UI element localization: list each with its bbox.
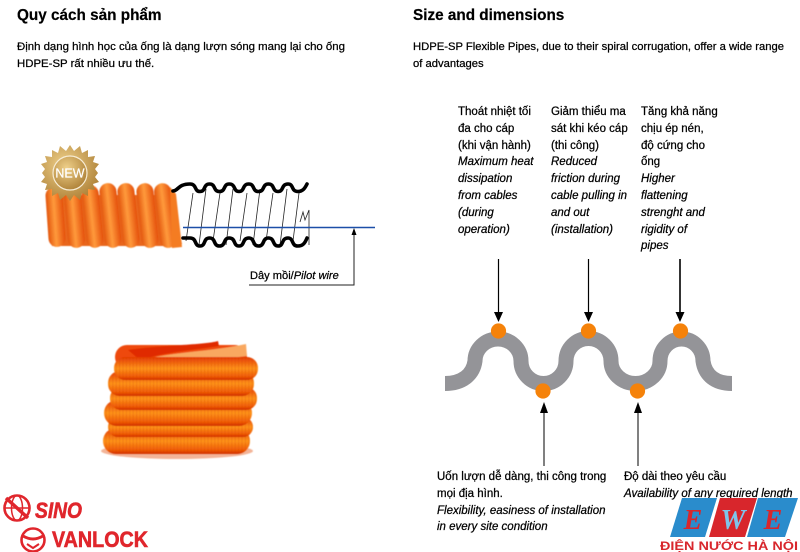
cross-section: spiral wire lines (186, 189, 309, 245)
text block: English intro: of advantages (413, 58, 484, 70)
callout: heat dissipation: (khi vận hành) (458, 140, 531, 152)
heading: Size and dimensions: Size and dimensions (413, 7, 564, 24)
VANLOCK logo: VANLOCK (52, 527, 148, 552)
callout: heat dissipation: đa cho cáp (458, 123, 514, 135)
EWE logo: E (763, 505, 782, 536)
text block: Vietnamese intro (16, 41, 345, 70)
callout: heat dissipation: Thoát nhiệt tối (458, 106, 531, 118)
callout: reduced friction: (installation) (551, 224, 613, 236)
EWE logo: E (683, 505, 702, 536)
callout: heat dissipation: operation) (458, 224, 510, 236)
callout: flexibility: mọi địa hình. (437, 488, 503, 500)
corrugated wall diagram (445, 323, 732, 399)
callout: flattening strength: strenght and (641, 207, 705, 219)
callout: flattening strength: chịu ép nén, (641, 123, 704, 135)
callout: reduced friction: Giảm thiểu ma (551, 106, 626, 118)
icon: VANLOCK emblem (22, 528, 44, 552)
icon: SINO globe (4, 496, 30, 520)
callout: flattening strength: ống (641, 156, 660, 168)
callout: flexibility: Uốn lượn dễ dàng, thi công trong (437, 471, 606, 483)
pilot wire leader arrow (249, 228, 356, 285)
cross-section: corrugated walls (173, 184, 307, 246)
arrow: flexibility (540, 402, 548, 466)
callout: reduced friction: Reduced (551, 156, 597, 168)
heading: Quy cách sản phẩm: Quy cách sản phẩm (17, 7, 162, 24)
arrow: reduced friction (584, 259, 593, 322)
callout: reduced friction: sát khi kéo cáp (551, 123, 628, 135)
SINO logo: SINO (35, 498, 82, 523)
callout: required length: Availability of any required length (624, 488, 793, 500)
callout: flattening strength: rigidity of (641, 224, 687, 236)
text block: English intro (413, 41, 784, 70)
orange markers (491, 323, 688, 399)
NEW badge (41, 145, 99, 201)
callout: flattening strength: flattening (641, 190, 688, 202)
callout: reduced friction: friction during (551, 173, 620, 185)
text block: English intro: HDPE-SP Flexible Pipes, due to their spiral corrugation, offer a wide range (413, 41, 784, 53)
callout: heat dissipation (458, 105, 534, 236)
callout: flattening strength: pipes (641, 240, 668, 252)
callout: reduced friction: and out (551, 207, 589, 219)
arrow: flattening strength (676, 259, 684, 322)
callout: reduced friction: (thi công) (551, 140, 599, 152)
arrow: required length (634, 402, 642, 466)
callout: flattening strength: Tăng khả năng (641, 106, 718, 118)
callout: reduced friction (551, 104, 628, 236)
callout: heat dissipation: Maximum heat (458, 156, 533, 168)
callout: required length: Độ dài theo yêu cầu (624, 471, 726, 483)
grey wave profile (445, 338, 732, 384)
VANLOCK logo (22, 527, 148, 552)
callout: heat dissipation: (during (458, 207, 494, 219)
coiled orange pipe (101, 341, 258, 459)
pilot wire label: Dây mồi/Pilot wire (250, 270, 339, 282)
callout: flexibility: in every site condition (437, 521, 548, 533)
text block: Vietnamese intro: Định dạng hình học của ống là dạng lượn sóng mang lại cho ống (17, 41, 345, 53)
callout: flattening strength: Higher (641, 173, 675, 185)
callout: flattening strength: độ cứng cho (641, 140, 705, 152)
arrow: heat dissipation (494, 259, 503, 322)
EWE logo: W (721, 505, 748, 536)
text block: Vietnamese intro: HDPE-SP rất nhiều ưu thế. (17, 58, 154, 70)
callout: flattening strength (640, 106, 718, 252)
blue pilot wire (183, 226, 375, 228)
callout: heat dissipation: dissipation (458, 173, 512, 185)
NEW badge: NEW (55, 166, 85, 180)
callout: flexibility: Flexibility, easiness of installation (437, 505, 606, 517)
orange corrugated pipe (45, 182, 182, 249)
callout: flexibility (437, 469, 606, 533)
callout: heat dissipation: from cables (458, 190, 517, 202)
SINO logo (4, 496, 82, 523)
callout: reduced friction: cable pulling in (551, 190, 627, 202)
callout: required length (623, 470, 793, 500)
